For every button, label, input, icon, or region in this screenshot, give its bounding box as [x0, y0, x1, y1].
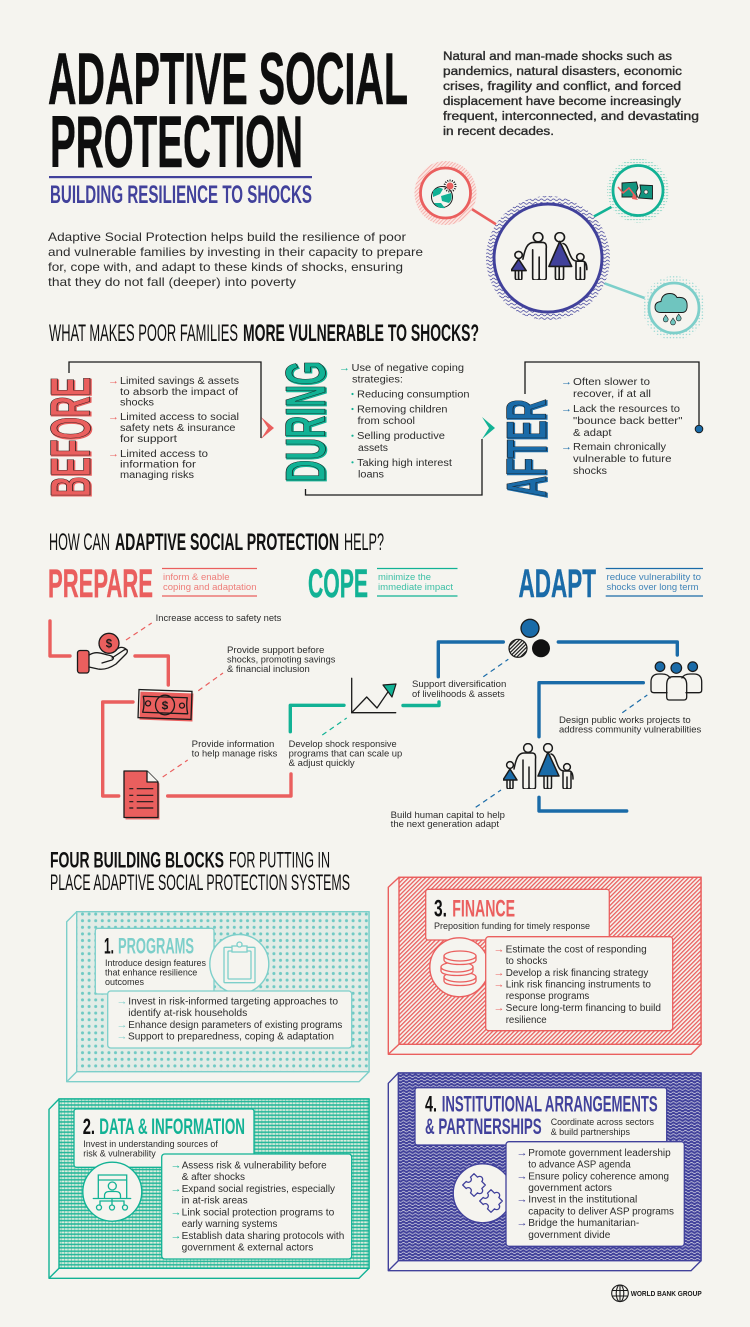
card: institutional list: Promote government leadership [528, 1148, 671, 1159]
card: programs list: Support to preparedness, coping & adaptation [128, 1032, 334, 1042]
list: after [561, 376, 683, 477]
icon: document [124, 771, 160, 820]
card: programs list: Enhance design parameters of existing programs [128, 1020, 342, 1031]
heading: how can adaptive social protection help: HOW CAN [49, 529, 110, 556]
card: institutional list: Bridge the humanitarian- [528, 1218, 639, 1229]
card: data list: government & external actors [182, 1242, 313, 1254]
label: during: DURING [274, 361, 338, 482]
heading: four building blocks [50, 847, 350, 895]
dashed leader lines [126, 623, 647, 807]
card: finance heading: 3. [434, 896, 447, 923]
card: institutional heading: & PARTNERSHIPS [425, 1114, 542, 1139]
flow labels: to help manage risks [192, 748, 278, 758]
legend: cope: immediate impact [378, 582, 453, 592]
label: before: BEFORE [40, 378, 104, 498]
panel: 4 institutional arrangements [388, 1073, 701, 1271]
card: data heading [74, 1109, 254, 1167]
card: institutional list: → [516, 1194, 528, 1206]
icon: banknote [138, 690, 193, 721]
card: institutional heading: Coordinate across sectors [551, 1117, 654, 1127]
flow path: prepare [50, 621, 291, 796]
list: during: Selling productive [357, 431, 445, 442]
card: data list: → [170, 1160, 182, 1172]
icon: community group [651, 662, 702, 700]
card: data heading: Invest in understanding sources of [83, 1139, 218, 1149]
card: data list: & after shocks [182, 1172, 245, 1183]
list: before: information for [120, 460, 197, 470]
card: programs list: Invest in risk-informed targeting approaches to [128, 996, 338, 1008]
intro paragraph: adaptive social protection: for, cope with, and adapt to these kinds of shocks, ensuring [48, 260, 403, 274]
card: data list: in at-risk areas [182, 1196, 248, 1206]
card: finance list [486, 937, 673, 1031]
card: programs heading: outcomes [105, 977, 144, 987]
list: during: from school [358, 416, 415, 427]
icon: hand with coin [78, 633, 127, 673]
heading: four building blocks: FOR PUTTING IN [229, 847, 330, 872]
flow path: cope [290, 702, 439, 732]
list: during: Use of negative coping [352, 363, 464, 374]
flow labels: address community vulnerabilities [559, 724, 702, 734]
flow labels: Build human capital to help [391, 810, 505, 820]
flow labels: Design public works projects to [559, 715, 691, 725]
card: programs list [108, 991, 352, 1048]
connector: during to after [306, 417, 495, 495]
list: after: Often slower to [573, 377, 650, 388]
flow labels: the next generation adapt [391, 819, 499, 829]
card: institutional list: → [516, 1217, 528, 1229]
flow labels: & adjust quickly [289, 758, 355, 768]
card: data list: Assess risk & vulnerability before [182, 1160, 327, 1172]
list: before: for support [120, 434, 177, 445]
icon: family [503, 743, 574, 789]
card: finance heading: Preposition funding for timely response [434, 921, 590, 931]
card: finance list: Estimate the cost of responding [506, 944, 647, 956]
flow path: adapt [438, 642, 677, 811]
list: after: "bounce back better" [573, 416, 683, 427]
card: institutional list: → [516, 1147, 528, 1159]
card: institutional list: government divide [528, 1230, 611, 1241]
label: before [39, 377, 104, 498]
icon: line chart with arrow [352, 678, 396, 713]
card: data heading: DATA & INFORMATION [99, 1114, 245, 1139]
list: after: → [561, 403, 572, 415]
list: during: Removing children [357, 404, 448, 416]
timeline: before, during, after [39, 361, 703, 498]
card: programs list: identify at-risk households [128, 1008, 247, 1019]
card: finance list: → [494, 1002, 504, 1014]
icon: coin stack [430, 938, 489, 997]
legend: cope: minimize the [378, 572, 431, 582]
intro paragraph: shocks: Natural and man-made shocks such as [443, 51, 672, 63]
card: finance heading: FINANCE [452, 896, 515, 923]
flow diagram: pathway [50, 613, 702, 829]
icon: puzzle pieces [453, 1164, 512, 1223]
heading: four building blocks: PLACE ADAPTIVE SOCIAL PROTECTION SYSTEMS [50, 870, 350, 895]
card: institutional list: to advance ASP agenda [528, 1160, 631, 1170]
intro paragraph: adaptive social protection [48, 230, 423, 289]
card: finance list: Develop a risk financing strategy [506, 968, 648, 979]
card: institutional list [506, 1142, 684, 1246]
card: programs list: → [116, 996, 128, 1008]
flow labels: Develop shock responsive [289, 739, 397, 749]
card: institutional heading [415, 1088, 667, 1145]
legend: adapt: ADAPT [518, 562, 596, 606]
list: after: Lack the resources to [573, 404, 680, 415]
heading: what makes poor families more vulnerable: WHAT MAKES POOR FAMILIES [49, 320, 238, 347]
icon: banknote: $ [161, 698, 169, 713]
flow labels: Support diversification [412, 679, 506, 689]
title: PROTECTION [50, 102, 303, 183]
panel: 1 programs [67, 912, 369, 1082]
card: data list: Expand social registries, especially [182, 1184, 335, 1195]
connector: before to during [69, 362, 274, 439]
label: after [495, 399, 560, 498]
list: during: assets [358, 443, 388, 454]
card: finance list: → [494, 978, 504, 990]
intro paragraph: adaptive social protection: and vulnerable families by investing in their capacity to prepare [48, 245, 423, 259]
list: before [108, 375, 239, 481]
intro paragraph: shocks: in recent decades. [443, 126, 554, 138]
card: data list: Link social protection programs to [182, 1208, 335, 1218]
card: finance list: Secure long-term financing to build [506, 1003, 661, 1014]
label: during [274, 361, 339, 483]
list: before: → [108, 375, 119, 387]
flow labels: & financial inclusion [227, 664, 310, 674]
card: finance list: to shocks [506, 956, 547, 967]
icon: pandemic globe [414, 161, 476, 225]
list: during: Reducing consumption [357, 390, 470, 400]
intro paragraph: shocks: frequent, interconnected, and devastating [443, 111, 699, 123]
card: institutional heading: & build partnerships [551, 1127, 630, 1137]
icon: clipboard [210, 934, 269, 994]
card: data list [162, 1154, 352, 1259]
list: before: safety nets & insurance [120, 423, 236, 434]
label: after: AFTER [496, 400, 560, 498]
card: institutional list: Invest in the institutional [528, 1194, 637, 1206]
flow labels: Provide information [192, 739, 274, 749]
icon: hand with coin: $ [106, 638, 113, 650]
flow labels: Increase access to safety nets [156, 613, 282, 623]
logo: world bank group [612, 1285, 702, 1302]
card: institutional list: government actors [528, 1183, 612, 1194]
title: ADAPTIVE SOCIAL [48, 39, 408, 120]
list: before: Limited access to [120, 449, 208, 460]
flow labels: of livelihoods & assets [412, 689, 505, 699]
card: data list: early warning systems [182, 1219, 277, 1230]
icon: three diversification circles [509, 619, 550, 657]
list: before: → [108, 448, 119, 460]
heading: how can adaptive social protection help: HELP? [344, 529, 384, 556]
connector: after end [525, 362, 703, 433]
legend: prepare: inform & enable [163, 572, 230, 582]
card: data heading: 2. [83, 1114, 95, 1139]
card: finance list: resilience [506, 1015, 547, 1026]
card: data heading: risk & vulnerability [83, 1148, 156, 1158]
heading: what makes poor families more vulnerable: MORE VULNERABLE TO SHOCKS? [243, 320, 479, 347]
heading: how can adaptive social protection help [49, 529, 384, 556]
list: after: recover, if at all [573, 389, 651, 400]
list: before: Limited savings & assets [120, 376, 239, 387]
flow labels: programs that can scale up [289, 748, 402, 758]
card: programs heading: PROGRAMS [118, 933, 194, 958]
card: institutional list: Ensure policy coherence among [528, 1172, 669, 1182]
list: during: strategies: [352, 374, 403, 386]
intro paragraph: shocks [443, 51, 699, 138]
card: data list: → [170, 1183, 182, 1195]
logo: world bank group: WORLD BANK GROUP [631, 1289, 702, 1298]
icon: money and falling chart [607, 158, 669, 222]
list: before: → [108, 411, 119, 423]
list: before: shocks [120, 398, 154, 408]
list: after: → [561, 376, 572, 388]
flow labels [156, 613, 702, 829]
legend: cope: COPE [308, 562, 368, 606]
list: before: to absorb the impact of [120, 387, 238, 398]
intro paragraph: adaptive social protection: Adaptive Social Protection helps build the resilience of poor [48, 230, 406, 244]
list: during: → [339, 362, 350, 374]
card: finance list: → [494, 967, 504, 979]
subtitle: building resilience to shocks: BUILDING RESILIENCE TO SHOCKS [50, 181, 312, 209]
list: after: & adapt [573, 428, 612, 439]
card: programs list: → [116, 1019, 128, 1031]
legend: adapt: shocks over long term [606, 582, 699, 592]
title [48, 39, 408, 183]
label: during: DURING [275, 362, 339, 483]
diagram: family connected to shocks [414, 158, 705, 340]
card: institutional list: capacity to deliver ASP programs [528, 1206, 674, 1218]
card: institutional list: → [516, 1170, 528, 1182]
card: finance list: response programs [506, 991, 589, 1002]
intro paragraph: shocks: crises, fragility and conflict, and forced [443, 81, 681, 93]
list: during [339, 362, 470, 480]
icon: data presenter [83, 1162, 142, 1221]
connectors [468, 203, 650, 300]
card: programs heading: Introduce design features [105, 958, 206, 968]
card: programs heading: 1. [104, 933, 114, 958]
list: after: Remain chronically [573, 442, 666, 453]
heading: how can adaptive social protection help: ADAPTIVE SOCIAL PROTECTION [115, 529, 339, 556]
panel: 2 data and information [49, 1099, 369, 1278]
legend: prepare: PREPARE [48, 562, 153, 606]
list: before: Limited access to social [120, 412, 239, 423]
list: after: vulnerable to future [573, 454, 672, 465]
icon: storm cloud [643, 276, 705, 340]
card: finance list: Link risk financing instruments to [506, 980, 651, 990]
intro paragraph: adaptive social protection: that they do not fall (deeper) into poverty [48, 275, 296, 289]
panel: 3 finance [388, 877, 701, 1054]
card: programs list: → [116, 1030, 128, 1042]
list: before: managing risks [120, 470, 194, 481]
card: data list: Establish data sharing protocols with [182, 1231, 344, 1242]
list: after: → [561, 441, 572, 453]
list: after: shocks [573, 466, 607, 477]
card: institutional heading: 4. [425, 1092, 437, 1117]
flow labels: shocks, promoting savings [227, 654, 336, 664]
card: data list: → [170, 1230, 182, 1242]
label: after: AFTER [495, 399, 559, 497]
card: finance heading [426, 889, 609, 940]
card: programs heading: that enhance resilience [105, 968, 197, 978]
card: finance list: → [494, 944, 504, 956]
flow labels: Provide support before [227, 645, 324, 655]
intro paragraph: shocks: displacement have become increasingly [443, 96, 681, 108]
card: data list: → [170, 1206, 182, 1218]
legend: adapt: reduce vulnerability to [606, 572, 701, 582]
legend: prepare: coping and adaptation [163, 582, 256, 592]
heading: four building blocks: FOUR BUILDING BLOCKS [50, 847, 224, 872]
label: before: BEFORE [39, 377, 103, 497]
list: during: Taking high interest [357, 458, 452, 469]
card: programs heading [95, 928, 214, 994]
list: during: loans [358, 470, 384, 480]
icon: family circle [486, 196, 610, 320]
intro paragraph: shocks: pandemics, natural disasters, economic [443, 66, 682, 78]
